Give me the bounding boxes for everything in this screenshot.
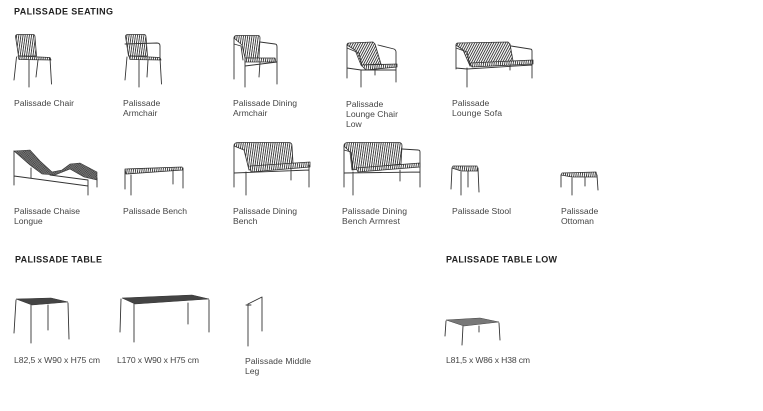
icon: table L82,5 — [14, 298, 69, 343]
heading: Palissade Table Low: PALISSADE TABLE LOW — [446, 254, 558, 264]
icon: low table — [445, 318, 500, 345]
icon: Palissade Bench — [125, 167, 183, 195]
label: Palissade Middle Leg: Palissade Middle — [245, 356, 311, 366]
label: Palissade Dining Bench: Bench — [233, 216, 258, 226]
label: Palissade Ottoman: Palissade — [561, 206, 598, 216]
icon: Palissade Armchair — [125, 34, 162, 87]
label: Palissade Chaise Longue: Longue — [14, 216, 43, 226]
icon: table L170 — [120, 295, 209, 342]
label: Palissade Armchair: Armchair — [123, 108, 158, 118]
label: Palissade Lounge Chair Low: Low — [346, 119, 363, 129]
label: Palissade Dining Bench Armrest: Bench Armrest — [342, 216, 401, 226]
label: table L82,5 dimensions: L82,5 x W90 x H75 cm — [14, 355, 100, 365]
label: Palissade Lounge Chair Low: Lounge Chair — [346, 109, 398, 119]
label: Palissade Middle Leg: Leg — [245, 366, 260, 376]
label: low table dimensions: L81,5 x W86 x H38 cm — [446, 355, 530, 365]
label: Palissade Lounge Sofa: Lounge Sofa — [452, 108, 502, 118]
heading: Palissade Table: PALISSADE TABLE — [15, 254, 102, 264]
label: Palissade Dining Bench Armrest: Palissade Dining — [342, 206, 407, 216]
icon: Palissade Chaise Longue — [14, 150, 97, 195]
label: Palissade Dining Bench: Palissade Dining — [233, 206, 297, 216]
label: Palissade Chaise Longue: Palissade Chaise — [14, 206, 80, 216]
label: Palissade Chair: Palissade Chair — [14, 98, 74, 108]
label: Palissade Lounge Sofa: Palissade — [452, 98, 489, 108]
label: table L170 dimensions: L170 x W90 x H75 cm — [117, 355, 199, 365]
icon: Palissade Dining Bench — [234, 142, 310, 195]
icon: Palissade Stool — [451, 166, 479, 195]
icon: Palissade Middle Leg — [246, 297, 262, 346]
label: Palissade Stool: Palissade Stool — [452, 206, 511, 216]
icon: Palissade Lounge Sofa — [456, 42, 533, 87]
label: Palissade Ottoman: Ottoman — [561, 216, 594, 226]
label: Palissade Bench: Palissade Bench — [123, 206, 187, 216]
icon: Palissade Dining Armchair — [234, 36, 277, 87]
icon: Palissade Ottoman — [561, 172, 598, 195]
icon: Palissade Lounge Chair Low — [347, 42, 397, 87]
heading: Palissade Seating: PALISSADE SEATING — [14, 6, 113, 16]
label: Palissade Armchair: Palissade — [123, 98, 160, 108]
icon: Palissade Chair — [14, 34, 52, 87]
icon: Palissade Dining Bench Armrest — [344, 142, 420, 195]
label: Palissade Dining Armchair: Palissade Dining — [233, 98, 297, 108]
label: Palissade Lounge Chair Low: Palissade — [346, 99, 383, 109]
label: Palissade Dining Armchair: Armchair — [233, 108, 268, 118]
